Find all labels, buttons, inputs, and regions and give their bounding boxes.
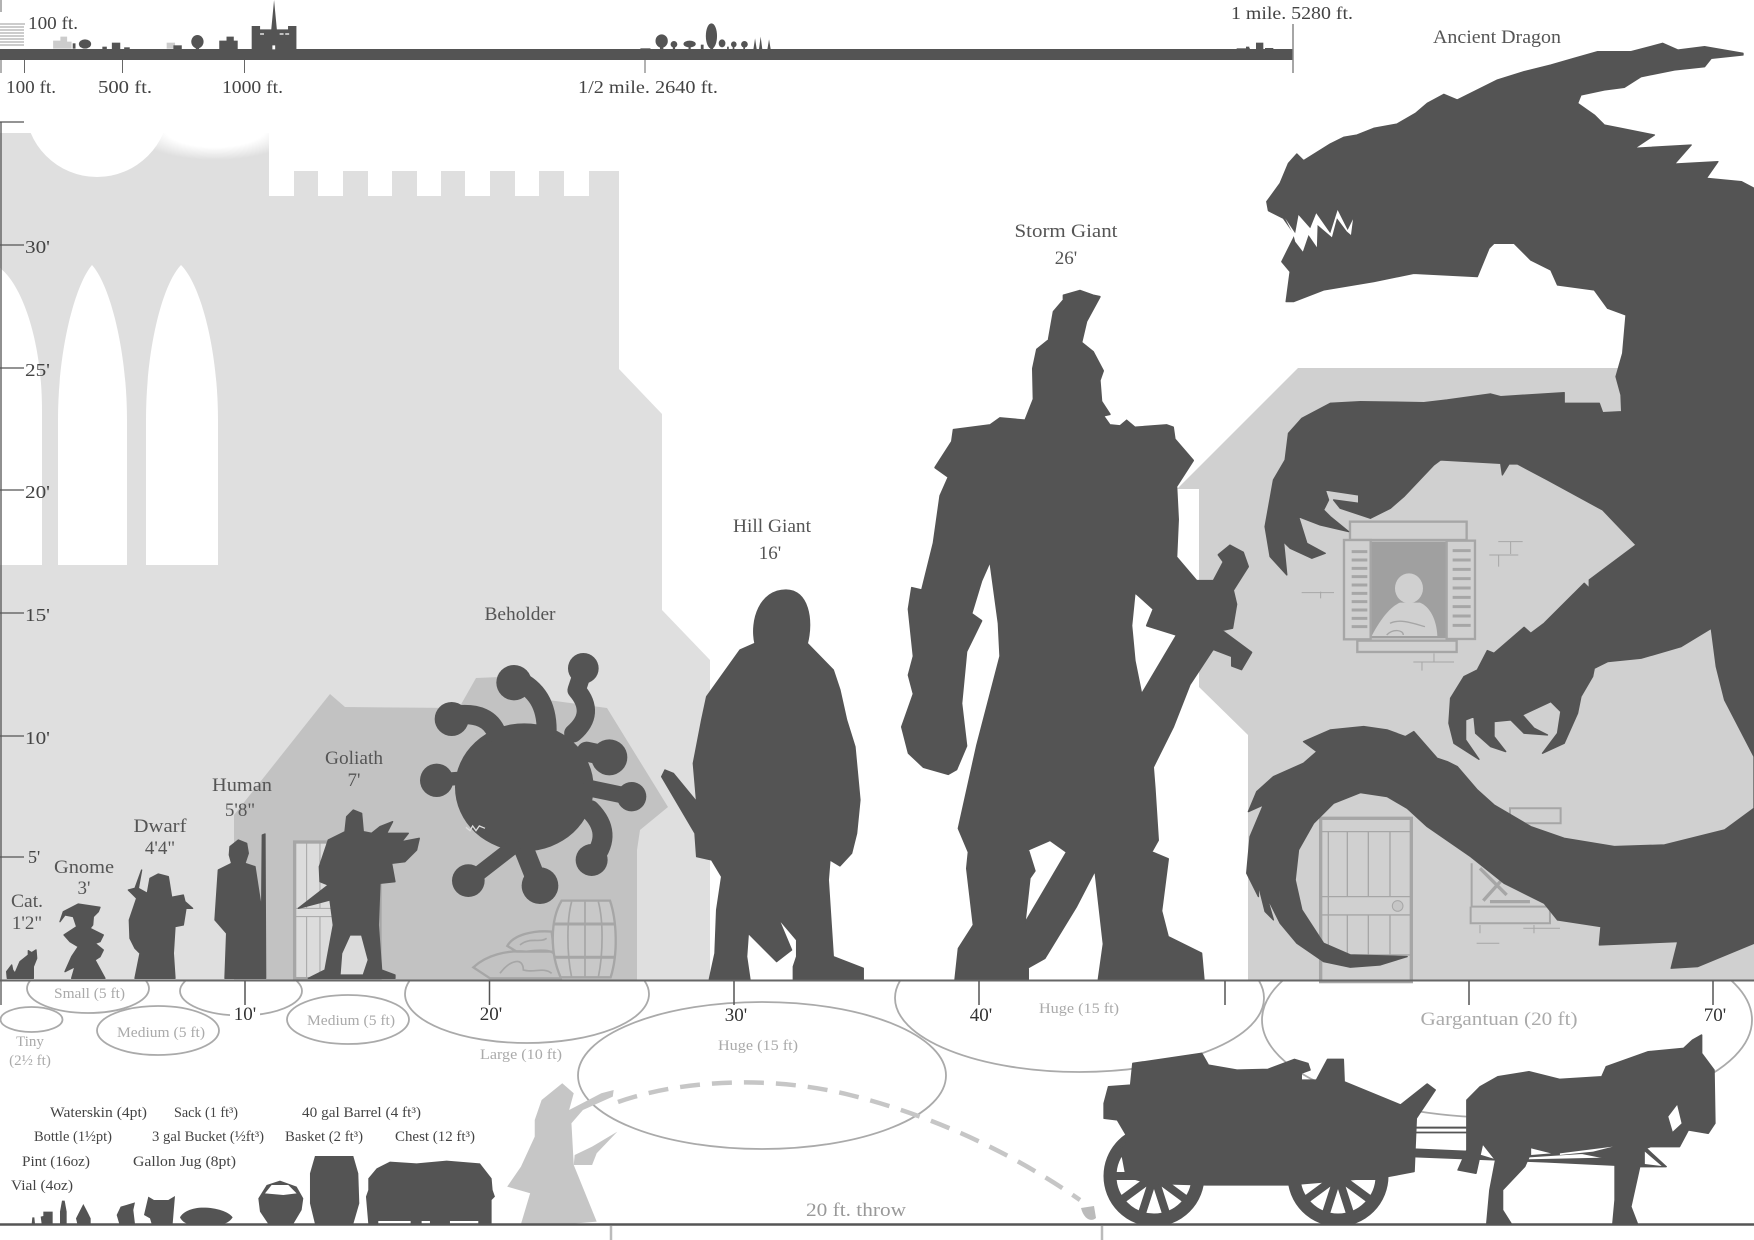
wagon shafts <box>1414 1127 1617 1166</box>
throw distance markers <box>611 1226 1102 1240</box>
tick label 15 ft: 15' <box>25 605 50 625</box>
axis label 70 ft: 70' <box>1704 1005 1726 1026</box>
label: hill giant: Hill Giant <box>733 516 812 537</box>
horse <box>1458 1035 1715 1224</box>
item: bucket: 3 gal Bucket (½ft³) <box>152 1129 264 1145</box>
axis label 10 ft: 10' <box>234 1004 256 1025</box>
distance label: one mile: 1 mile. 5280 ft. <box>1231 3 1353 23</box>
barrel <box>553 901 616 977</box>
axis label 20 ft: 20' <box>480 1004 502 1025</box>
throw arc <box>618 1082 1080 1200</box>
character: human <box>215 834 266 978</box>
item: gallon jug: Gallon Jug (8pt) <box>133 1154 236 1170</box>
distance label: 500 ft: 500 ft. <box>98 77 152 97</box>
horizontal ground scale <box>0 980 1754 1026</box>
throw distance label: 20 ft. throw <box>806 1200 906 1221</box>
door <box>1321 818 1411 982</box>
character: storm giant <box>902 291 1252 979</box>
label: storm giant height: 26' <box>1055 248 1077 269</box>
character: dwarf <box>128 870 193 978</box>
character labels <box>11 27 1562 934</box>
label: dwarf: Dwarf <box>134 816 187 837</box>
wagon wheels <box>1107 1131 1385 1221</box>
tick label 10 ft: 10' <box>25 728 50 748</box>
label: beholder: Beholder <box>484 604 556 625</box>
size: gargantuan: Gargantuan (20 ft) <box>1420 1009 1578 1030</box>
sacks <box>473 931 561 978</box>
axis label 30 ft: 30' <box>725 1005 747 1026</box>
tick label 25 ft: 25' <box>25 360 50 380</box>
creature space ellipses <box>0 982 1753 1150</box>
distance label: 1000 ft: 1000 ft. <box>222 77 283 97</box>
skyline silhouettes on scale bar <box>53 0 771 49</box>
item ground line <box>0 1223 1754 1226</box>
size: medium dwarf: Medium (5 ft) <box>117 1025 205 1041</box>
castle arched windows <box>0 265 218 565</box>
item: basket: Basket (2 ft³) <box>285 1129 363 1145</box>
size: tiny: Tiny <box>16 1034 44 1050</box>
distance scale bar <box>0 0 1353 97</box>
tick label 20 ft: 20' <box>25 482 50 502</box>
item: chest: Chest (12 ft³) <box>395 1129 475 1145</box>
skyline silhouette at one mile <box>1237 43 1273 50</box>
background: house window with person <box>1302 522 1523 671</box>
bottle <box>60 1201 67 1224</box>
character: cat <box>7 950 37 978</box>
character: goliath <box>298 810 419 978</box>
background: wooden door behind goliath <box>295 842 380 979</box>
barrel <box>310 1156 359 1224</box>
background: barrel and sacks <box>473 901 616 978</box>
item: sack: Sack (1 ft³) <box>174 1105 238 1121</box>
dagger <box>574 1132 617 1165</box>
vertical height scale <box>0 122 50 1005</box>
label: goliath: Goliath <box>325 748 383 769</box>
item: waterskin: Waterskin (4pt) <box>50 1105 147 1121</box>
character: ancient dragon <box>1247 43 1754 968</box>
label: cat height: 1'2" <box>12 913 42 934</box>
item: barrel: 40 gal Barrel (4 ft³) <box>302 1105 421 1121</box>
waterskin <box>76 1204 91 1224</box>
sack <box>180 1208 233 1224</box>
size: large: Large (10 ft) <box>480 1047 562 1063</box>
wagon body <box>1104 1053 1617 1185</box>
gallon jug <box>117 1202 135 1224</box>
vial <box>32 1217 35 1224</box>
character: beholder <box>420 653 646 904</box>
size: huge storm giant: Huge (15 ft) <box>1039 1001 1119 1017</box>
label: storm giant: Storm Giant <box>1014 221 1118 242</box>
label: dwarf height: 4'4" <box>145 838 175 859</box>
character: dagger thrower <box>507 1083 617 1224</box>
thrown pouch <box>1081 1206 1096 1220</box>
creature size labels <box>9 986 1578 1069</box>
distance label: half mile: 1/2 mile. 2640 ft. <box>578 77 718 97</box>
item: bottle: Bottle (1½pt) <box>34 1129 112 1145</box>
tick label 5 ft: 5' <box>28 847 40 867</box>
pint <box>41 1212 53 1224</box>
item: vial: Vial (4oz) <box>11 1178 73 1194</box>
label: human: Human <box>212 775 273 796</box>
chest <box>366 1161 495 1224</box>
background: house door and shop window <box>1321 808 1561 982</box>
character: hill giant <box>662 590 863 979</box>
label: gnome: Gnome <box>54 857 114 878</box>
item labels <box>11 1105 475 1194</box>
label: gnome height: 3' <box>78 878 90 899</box>
label: ancient dragon: Ancient Dragon <box>1433 27 1562 48</box>
shop window <box>1510 808 1561 823</box>
axis label 40 ft: 40' <box>970 1005 992 1026</box>
item silhouettes <box>32 1156 495 1224</box>
label: cat: Cat. <box>11 891 43 912</box>
background: thatched house <box>234 676 668 980</box>
distance label: 100 ft top: 100 ft. <box>28 13 78 33</box>
size: tiny value: (2½ ft) <box>9 1053 51 1069</box>
size: medium goliath: Medium (5 ft) <box>307 1013 395 1029</box>
size: huge hill giant: Huge (15 ft) <box>718 1038 798 1054</box>
basket <box>258 1181 303 1224</box>
wagon <box>1104 1053 1617 1221</box>
character: gnome <box>60 904 105 978</box>
tick label 30 ft: 30' <box>25 237 50 257</box>
background: castle wall <box>0 133 710 980</box>
label: goliath height: 7' <box>348 770 360 791</box>
size: small: Small (5 ft) <box>54 986 125 1002</box>
item: pint: Pint (16oz) <box>22 1154 90 1170</box>
bucket <box>144 1196 175 1224</box>
label: hill giant height: 16' <box>759 543 781 564</box>
dragon teeth <box>1285 210 1353 252</box>
distance label: 100 ft: 100 ft. <box>6 77 56 97</box>
background: dragon-side house <box>1177 368 1754 980</box>
label: human height: 5'8" <box>225 800 255 821</box>
